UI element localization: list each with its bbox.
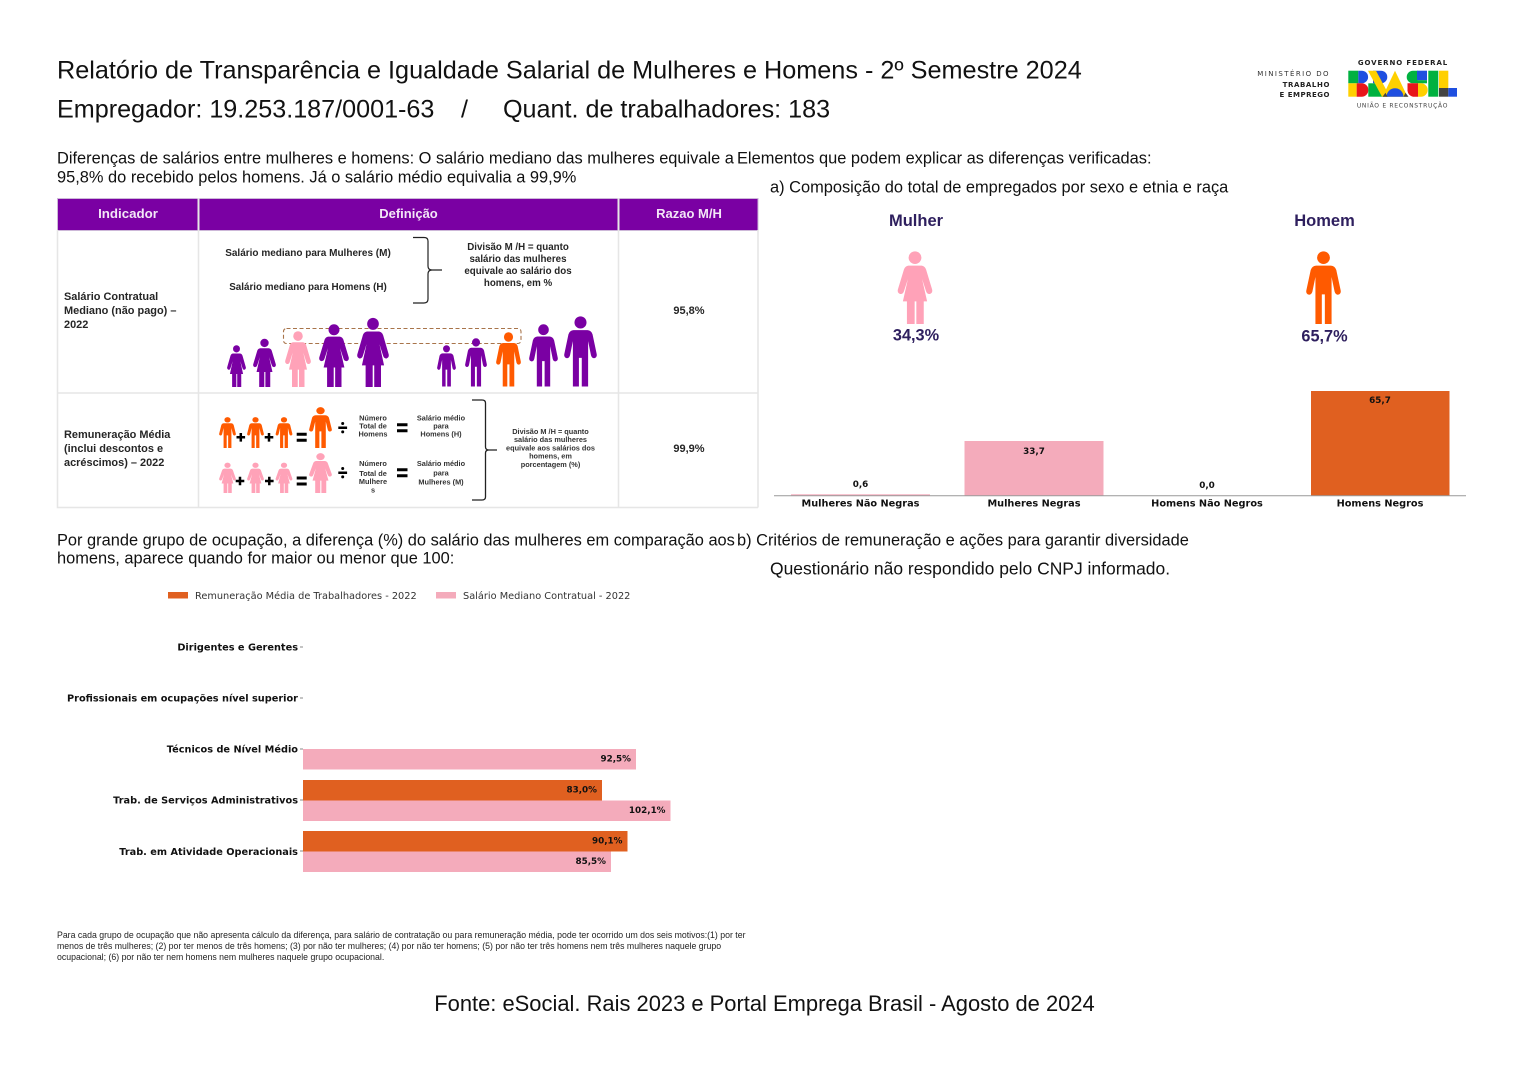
row 1 indicator: Salário Contratual (64, 291, 158, 303)
bar chart: composition by sex and race: Homens Negros (1337, 498, 1424, 510)
row 2 brace and explanation: salário das mulheres (514, 435, 587, 444)
panel: sex composition pictograms (889, 212, 1355, 346)
row 1 definition labels: Salário mediano para Homens (H) (229, 282, 387, 293)
logo: ministério e governo federal: MINISTÉRIO DO (1257, 69, 1330, 78)
row 2 indicator: acréscimos) – 2022 (64, 457, 164, 469)
row 2 formula: men: Número (359, 414, 387, 422)
icon: man (1306, 251, 1341, 324)
bar chart: occupation groups: Dirigentes e Gerentes (177, 642, 298, 654)
row 2 formula: men: para (433, 422, 450, 430)
row 2 formula: women (219, 453, 466, 494)
text: questionário: Questionário não respondido pelo CNPJ informado. (770, 559, 1170, 579)
text: grupo de ocupação: homens, aparece quando for maior ou menor que 100: (57, 550, 454, 568)
table header: Definição (379, 206, 438, 221)
footnote: Para cada grupo de ocupação que não apresenta cálculo da diferença, para salário de contratação ou para remuneração média, pode ter ocorrido um dos seis motivos:(1) por ter (57, 930, 746, 940)
bar chart: occupation groups: 92,5% (600, 755, 631, 765)
bar chart: occupation groups: Trab. em Atividade Operacionais (119, 847, 298, 858)
panel: indicator table (57, 198, 758, 508)
footnote: ocupacional; (6) por não ter nem homens nem mulheres naquele grupo ocupacional. (57, 952, 384, 962)
text: diferenças de salários: 95,8% do recebido pelos homens. Já o salário médio equivalia a 99,9% (57, 169, 576, 187)
logo: ministério e governo federal: E EMPREGO (1280, 91, 1330, 99)
row 1 definition labels: Divisão M /H = quanto (467, 242, 569, 253)
chart legend (168, 590, 630, 602)
value: men share: 65,7% (1301, 328, 1348, 346)
table header: Indicador (98, 206, 158, 221)
row 2 formula: men: Homens (359, 430, 387, 438)
median highlight dashed box (284, 328, 521, 344)
table header: Razao M/H (656, 206, 722, 221)
row 2 brace and explanation (472, 400, 595, 500)
logo: ministério e governo federal: UNIÃO E RECONSTRUÇÃO (1357, 102, 1448, 110)
row 2 formula: women: para (433, 468, 450, 478)
row 2 formula: women: Mulheres (M) (418, 478, 464, 486)
row 2 indicator: Remuneração Média (64, 429, 171, 441)
logo: ministério e governo federal (1257, 59, 1457, 110)
text: diferenças de salários: Diferenças de salários entre mulheres e homens: O salário mediano das mulheres equivale a (57, 150, 735, 168)
row 2 indicator: (inclui descontos e (64, 443, 163, 455)
title: Quant. de trabalhadores: 183 (503, 95, 830, 123)
logo: ministério e governo federal: GOVERNO FEDERAL (1358, 59, 1448, 67)
logo: ministério e governo federal: TRABALHO (1283, 81, 1330, 89)
bar chart: composition by sex and race: 65,7 (1369, 396, 1391, 406)
icon: woman (898, 251, 932, 324)
bar chart: occupation groups: 85,5% (575, 857, 606, 867)
row 2 formula: men (219, 407, 466, 448)
row 2 brace and explanation: equivale aos salários dos (506, 444, 595, 452)
bar chart: composition by sex and race: Homens Não Negros (1151, 498, 1263, 510)
row 1 definition labels: salário das mulheres (469, 254, 567, 265)
bar chart: composition by sex and race (774, 391, 1466, 510)
row 2 brace and explanation: Divisão M /H = quanto (512, 427, 589, 436)
footnote: menos de três mulheres; (2) por ter menos de três homens; (3) por não ter mulheres; (4) por não ter homens; (5) por não ter três homens nem três mulheres naquele grupo (57, 941, 721, 951)
text: grupo de ocupação: Por grande grupo de ocupação, a diferença (%) do salário das mulheres em comparação aos (57, 532, 735, 550)
row 2 formula: men: Salário médio (417, 414, 466, 422)
bar chart: occupation groups: 90,1% (592, 836, 623, 846)
bar chart: occupation groups (67, 642, 670, 872)
title (57, 57, 1082, 123)
row 2 ratio: 99,9% (673, 443, 705, 455)
bar chart: composition by sex and race: 0,0 (1199, 481, 1215, 491)
row 1 indicator: 2022 (64, 319, 88, 331)
row 2 formula: women: s (371, 486, 375, 494)
bar chart: occupation groups: Técnicos de Nível Médio (167, 744, 298, 756)
row 2 formula: women: Mulhere (359, 477, 387, 486)
row 2 brace and explanation: porcentagem (%) (521, 460, 581, 469)
bar chart: composition by sex and race: 33,7 (1023, 447, 1045, 457)
bar chart: composition by sex and race: 0,6 (853, 480, 868, 490)
bar chart: composition by sex and race: Mulheres Não Negras (802, 498, 920, 510)
icons: women ordered by salary (227, 318, 389, 387)
bar chart: composition by sex and race: Mulheres Negras (987, 498, 1081, 510)
text: elementos heading: Elementos que podem explicar as diferenças verificadas: (737, 150, 1152, 168)
row 2 formula: men: Total de (359, 422, 387, 430)
title: / (461, 95, 468, 123)
heading: mulher: Mulher (889, 212, 944, 230)
bar chart: occupation groups: 102,1% (629, 806, 666, 816)
row 1 ratio: 95,8% (673, 305, 705, 317)
bar chart: occupation groups: 83,0% (566, 786, 597, 796)
source line: Fonte: eSocial. Rais 2023 e Portal Emprega Brasil - Agosto de 2024 (434, 991, 1095, 1016)
chart legend: Salário Mediano Contratual - 2022 (463, 590, 630, 602)
row 2 formula: women: Número (359, 459, 387, 468)
row 2 formula: women: Total de (359, 469, 387, 478)
row 1 definition labels: Salário mediano para Mulheres (M) (225, 248, 391, 259)
row 2 brace and explanation: homens, em (529, 452, 572, 460)
row 2 formula: men: Homens (H) (420, 430, 462, 438)
icons: men ordered by salary (437, 316, 597, 386)
chart legend: Remuneração Média de Trabalhadores - 2022 (195, 590, 417, 602)
title: Empregador: 19.253.187/0001-63 (57, 95, 434, 123)
bar chart: occupation groups: Profissionais em ocupações nível superior (67, 692, 298, 704)
value: women share: 34,3% (893, 326, 940, 344)
text: composição heading: a) Composição do total de empregados por sexo e etnia e raça (770, 179, 1229, 197)
table header (58, 198, 758, 230)
bar chart: occupation groups: Trab. de Serviços Administrativos (113, 796, 298, 806)
row 1 definition labels (225, 238, 572, 303)
row 2 formula: women: Salário médio (417, 459, 466, 468)
row 1 definition labels: equivale ao salário dos (464, 266, 572, 277)
row 1 indicator: Mediano (não pago) – (64, 305, 176, 317)
text: critérios heading: b) Critérios de remuneração e ações para garantir diversidade (737, 532, 1189, 550)
title: Relatório de Transparência e Igualdade Salarial de Mulheres e Homens - 2º Semestre 2024 (57, 57, 1082, 85)
heading: homem: Homem (1294, 212, 1355, 230)
row 1 definition labels: homens, em % (484, 278, 552, 289)
